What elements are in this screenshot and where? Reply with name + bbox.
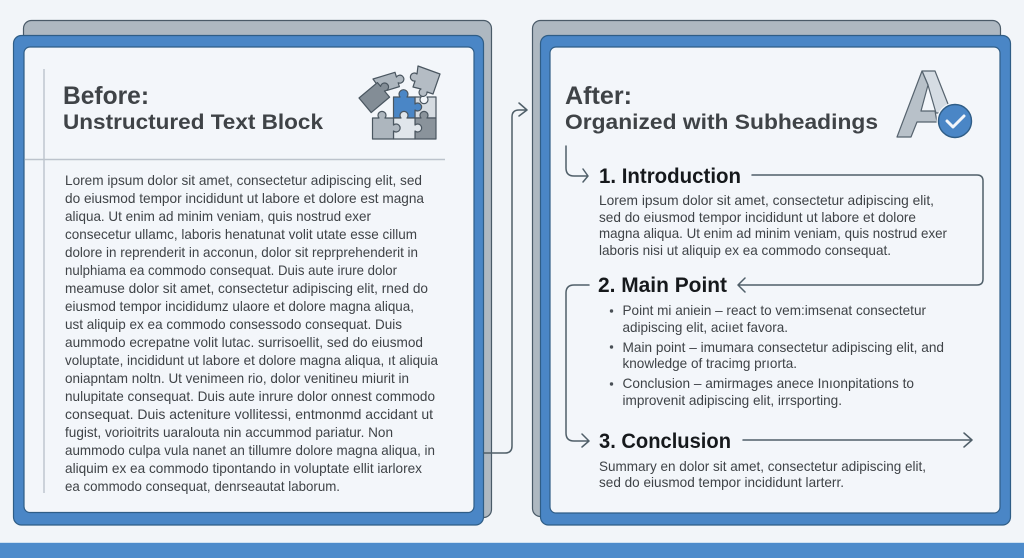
- arrow: main point to conclusion: [566, 285, 589, 447]
- section: main point: [598, 274, 944, 408]
- bullet list: knowledge of tracimg prıorta.: [622, 355, 797, 371]
- text block: unstructured paragraph: aliqua. Ut enim ad minim veniam, quis nostrud exer: [65, 208, 371, 224]
- heading: after: After:: [565, 82, 632, 110]
- text block: unstructured paragraph: Lorem ipsum dolor sit amet, consectetur adipiscing elit, sed: [65, 172, 422, 188]
- text block: unstructured paragraph: do eiusmod tempor incididunt ut labore et dolore est magna: [65, 190, 424, 206]
- arrow: title to introduction: [566, 146, 588, 182]
- arrow: before panel to after panel: [484, 103, 527, 453]
- bullet list: [610, 302, 944, 408]
- bullet list: Main point – imumara consectetur adipiscing elit, and: [622, 339, 944, 355]
- section: conclusion: [599, 430, 926, 490]
- panel: before: [14, 20, 492, 525]
- text block: unstructured paragraph: consecetur ullamc, laboris henatunat volit utate esse cillum: [65, 226, 417, 242]
- bullet list: Conclusion – amirmages anece Inıonpitations to: [622, 375, 914, 391]
- icon: letter A with check badge: [897, 71, 974, 140]
- text block: unstructured paragraph: nulupitate consequat. Duis aute inrure dolor onnest commodo: [65, 388, 435, 404]
- section: introduction: [599, 165, 947, 258]
- bullet list: improvenit adipiscing elit, irrsporting.: [622, 392, 842, 408]
- arrow: introduction to main point: [738, 175, 983, 292]
- section: introduction: 1. Introduction: [599, 165, 741, 188]
- section: conclusion: sed do eiusmod tempor incididunt larterr.: [599, 474, 844, 490]
- text block: unstructured paragraph: consequat. Duis acteniture vollitessi, entmonmd accidant ut: [65, 406, 433, 422]
- text block: unstructured paragraph: dolore in reprenderit in acconun, dolor sit reprprehenderit in: [65, 244, 418, 260]
- footer band: [0, 542, 1024, 558]
- section: conclusion: 3. Conclusion: [599, 430, 731, 453]
- text block: unstructured paragraph: ust aliquip ex ea commodo consessodo consequat. Duis: [65, 316, 402, 332]
- text block: unstructured paragraph: oniapntam noltn. Ut venimeen rio, dolor venitineu miurit in: [65, 370, 409, 386]
- section: introduction: laboris nisi ut aliquip ex ea commodo consequat.: [599, 242, 891, 258]
- text block: unstructured paragraph: nulphiama ea commodo consequat. Duis aute irure dolor: [65, 262, 397, 278]
- icon: puzzle pieces: [359, 66, 440, 139]
- arrow: conclusion rule: [743, 433, 972, 447]
- text block: unstructured paragraph: fugist, vorioitrits uaralouta nin accummod pariatur. Non: [65, 424, 393, 440]
- section: introduction: magna aliqua. Ut enim ad minim veniam, quis nostrud exer: [599, 225, 947, 241]
- text block: unstructured paragraph: aummodo culpa vula nanet an tillumre dolore magna aliqua, in: [65, 442, 435, 458]
- section: introduction: Lorem ipsum dolor sit amet, consectetur adipiscing elit,: [599, 192, 934, 208]
- panel: after: [532, 20, 1010, 525]
- heading: after: Organized with Subheadings: [565, 111, 878, 134]
- text block: unstructured paragraph: voluptate, incididunt ut labore et dolore magna aliqua, ıt aliquia: [65, 352, 438, 368]
- section: main point: 2. Main Point: [598, 274, 727, 297]
- text block: unstructured paragraph: [65, 172, 438, 494]
- bullet list: adipiscing elit, aciıet favora.: [622, 319, 788, 335]
- text block: unstructured paragraph: aliquim ex ea commodo tipontando in voluptate ellit iarlorex: [65, 460, 422, 476]
- text block: unstructured paragraph: eiusmod tempor incididumz ulaore et dolore magna aliqua,: [65, 298, 414, 314]
- heading: after: [565, 82, 878, 134]
- section: introduction: sed do eiusmod tempor incididunt ut labore et dolore: [599, 209, 916, 225]
- text block: unstructured paragraph: aummodo ecrepatne volit lutac. surrisoellit, sed do eiusmod: [65, 334, 423, 350]
- text block: unstructured paragraph: meamuse dolor sit amet, consectetur adipiscing elit, rned do: [65, 280, 428, 296]
- heading: before: Before:: [63, 82, 149, 110]
- section: conclusion: Summary en dolor sit amet, consectetur adipiscing elit,: [599, 458, 926, 474]
- heading: before: [63, 82, 323, 134]
- text block: unstructured paragraph: ea commodo consequat, denrseautat laborum.: [65, 478, 340, 494]
- bullet list: Point mi aniein – react to vem:imsenat consectetur: [622, 302, 926, 318]
- heading: before: Unstructured Text Block: [63, 111, 323, 134]
